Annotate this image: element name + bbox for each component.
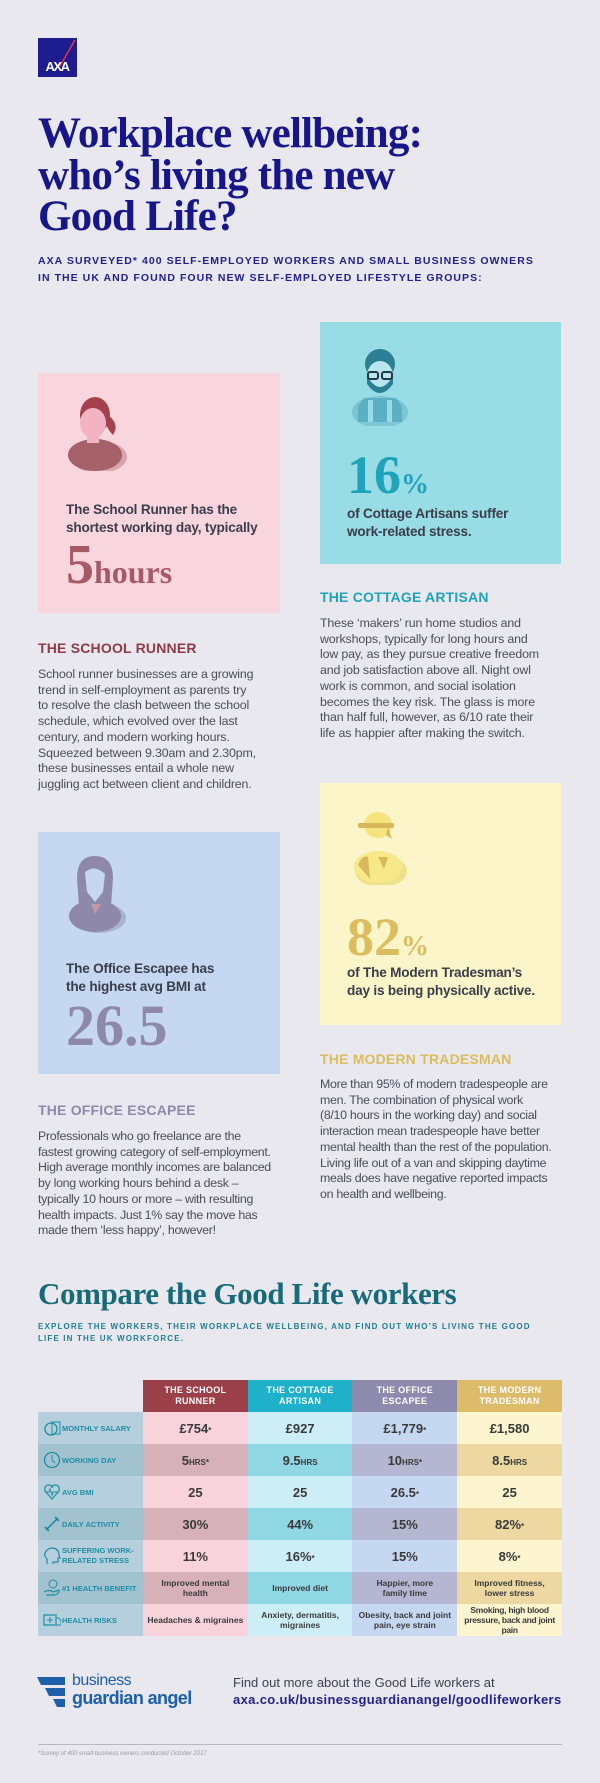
subtitle: compare: LIFE IN THE UK WORKFORCE. bbox=[38, 1334, 184, 1343]
stat text bbox=[66, 502, 258, 535]
logo: business guardian angel bbox=[37, 1672, 192, 1708]
table: comparison: 10HRS* bbox=[388, 1452, 422, 1468]
heading: the modern tradesman: THE MODERN TRADESMAN bbox=[320, 1051, 511, 1067]
table: comparison: #1 HEALTH BENEFIT bbox=[62, 1584, 136, 1592]
text: school runner description: School runner businesses are a growing bbox=[38, 667, 253, 681]
table: comparison: £927 bbox=[286, 1420, 315, 1436]
text: cottage artisan description: life as happier after making the switch. bbox=[320, 726, 525, 740]
table: comparison: 25 bbox=[188, 1484, 203, 1500]
table: comparison: £1,580 bbox=[490, 1420, 529, 1436]
table: comparison: RELATED STRESS bbox=[62, 1556, 129, 1565]
stat text: work-related stress. bbox=[347, 524, 471, 538]
stat text: The Office Escapee has bbox=[66, 961, 214, 976]
stat text bbox=[347, 965, 535, 998]
text: cottage artisan description: These ‘makers’ run home studios and bbox=[320, 616, 521, 630]
logo: business guardian angel: business bbox=[72, 1672, 131, 1689]
big number: 26.5: 26.5 bbox=[66, 993, 168, 1058]
text: modern tradesman description: meals does have negative reported impacts bbox=[320, 1171, 547, 1185]
table: comparison: ESCAPEE bbox=[382, 1396, 427, 1406]
title bbox=[38, 110, 422, 240]
text: modern tradesman description: Living life out of a van and skipping daytime bbox=[320, 1156, 546, 1170]
stat text: day is being physically active. bbox=[347, 982, 535, 998]
panel: modern tradesman bbox=[320, 783, 561, 1025]
table: comparison: 8.5HRS bbox=[492, 1452, 527, 1468]
icon: school runner woman bbox=[68, 397, 127, 471]
table: comparison: Improved diet bbox=[272, 1583, 328, 1593]
text: modern tradesman description bbox=[320, 1077, 551, 1201]
text: school runner description: these businesses entail a whole new bbox=[38, 761, 234, 775]
big number: 16%: 16% bbox=[347, 445, 429, 505]
table: comparison: THE COTTAGE bbox=[267, 1385, 334, 1395]
table: comparison: 25 bbox=[293, 1484, 307, 1500]
table: comparison: Happier, more bbox=[376, 1578, 433, 1588]
table: comparison: Anxiety, dermatitis, bbox=[261, 1610, 339, 1620]
table: comparison: 15% bbox=[392, 1548, 418, 1564]
subtitle: compare: EXPLORE THE WORKERS, THEIR WORKPLACE WELLBEING, AND FIND OUT WHO’S LIVING THE GOOD bbox=[38, 1322, 531, 1331]
footnote: *Survey of 400 small business owners conducted October 2017 bbox=[38, 1751, 207, 1757]
stat text: of The Modern Tradesman’s bbox=[347, 965, 522, 980]
text: school runner description: schedule, which evolved over the last bbox=[38, 714, 238, 728]
table: comparison: pressure, back and joint pain bbox=[464, 1615, 555, 1635]
table: comparison: Improved fitness, bbox=[474, 1578, 545, 1588]
table: comparison: 30% bbox=[182, 1516, 208, 1532]
text: modern tradesman description: interaction mean tradespeople have better bbox=[320, 1124, 540, 1138]
stat text: shortest working day, typically bbox=[66, 520, 257, 534]
table: comparison: AVG BMI bbox=[62, 1488, 94, 1496]
text: find out more: Find out more about the Good Life workers at bbox=[233, 1675, 495, 1690]
text: school runner description: trend in self-employment as parents try bbox=[38, 683, 246, 697]
text: school runner description: juggling act between client and children. bbox=[38, 777, 252, 791]
table: comparison: 15% bbox=[392, 1516, 418, 1532]
table: comparison: Smoking, high blood bbox=[470, 1605, 549, 1615]
text: cottage artisan description: and job satisfaction above all. Night owl bbox=[320, 663, 531, 677]
panel: cottage artisan bbox=[320, 322, 561, 564]
table: comparison: family time bbox=[383, 1588, 427, 1598]
text: office escapee description: typically 10 hours or more – with resulting bbox=[38, 1192, 253, 1206]
table: comparison: Improved mental bbox=[161, 1578, 229, 1588]
table: comparison bbox=[38, 1380, 562, 1636]
big number: 82%: 82% bbox=[347, 907, 429, 967]
text: cottage artisan description: than half full, however, as 6/10 rate their bbox=[320, 710, 533, 724]
text: modern tradesman description: men. The combination of physical work bbox=[320, 1093, 523, 1107]
table: comparison: DAILY ACTIVITY bbox=[62, 1520, 120, 1528]
table: comparison: migraines bbox=[280, 1620, 320, 1630]
logo: business guardian angel: guardian angel bbox=[72, 1688, 192, 1708]
text: cottage artisan description bbox=[320, 616, 539, 740]
table: comparison: WORKING DAY bbox=[62, 1456, 116, 1464]
table: comparison: pain, eye strain bbox=[374, 1620, 436, 1630]
table: comparison: 26.5* bbox=[391, 1484, 419, 1500]
title: Workplace wellbeing: bbox=[38, 110, 422, 157]
text: modern tradesman description: mental health than the rest of the population. bbox=[320, 1140, 551, 1154]
table: comparison: 9.5HRS bbox=[283, 1452, 318, 1468]
text: cottage artisan description: becomes the key risk. The glass is more bbox=[320, 695, 535, 709]
text: office escapee description bbox=[38, 1129, 271, 1237]
table: comparison: health bbox=[183, 1588, 208, 1598]
text: school runner description: to resolve the clash between the school bbox=[38, 698, 249, 712]
table: comparison: THE SCHOOL bbox=[164, 1385, 226, 1395]
text: cottage artisan description: low pay, as they pursue creative freedom bbox=[320, 647, 539, 661]
subtitle bbox=[38, 255, 534, 284]
table: comparison: ARTISAN bbox=[279, 1396, 321, 1406]
table: comparison: 11% bbox=[183, 1548, 208, 1564]
table: comparison: Headaches & migraines bbox=[147, 1615, 243, 1625]
text: office escapee description: High average monthly incomes are balanced bbox=[38, 1160, 271, 1174]
table: comparison: £1,779* bbox=[383, 1420, 426, 1436]
table: comparison: TRADESMAN bbox=[479, 1396, 540, 1406]
big number: 5 hours: 5hours bbox=[66, 534, 172, 596]
text: school runner description: Squeezed between 9.30am and 2.30pm, bbox=[38, 746, 256, 760]
table: comparison: lower stress bbox=[485, 1588, 534, 1598]
text: school runner description bbox=[38, 667, 256, 791]
table: comparison: SUFFERING WORK- bbox=[62, 1546, 134, 1555]
text: modern tradesman description: on health and wellbeing. bbox=[320, 1187, 446, 1201]
heading: compare the good life workers: Compare the Good Life workers bbox=[38, 1276, 456, 1311]
table: comparison: RUNNER bbox=[175, 1396, 216, 1406]
text: office escapee description: by long working hours behind a desk – bbox=[38, 1176, 238, 1190]
stat text bbox=[66, 961, 214, 994]
stat text: the highest avg BMI at bbox=[66, 978, 206, 994]
panel: office escapee bbox=[38, 832, 280, 1074]
table: comparison: MONTHLY SALARY bbox=[62, 1424, 131, 1432]
table: comparison: Obesity, back and joint bbox=[359, 1610, 451, 1620]
table: comparison: THE OFFICE bbox=[377, 1385, 433, 1395]
text: modern tradesman description: More than 95% of modern tradespeople are bbox=[320, 1077, 548, 1091]
table: comparison: 5HRS* bbox=[182, 1452, 209, 1468]
text: office escapee description: made them ‘less happy’, however! bbox=[38, 1223, 216, 1237]
heading: the cottage artisan: THE COTTAGE ARTISAN bbox=[320, 589, 489, 605]
text: school runner description: century, and modern working hours. bbox=[38, 730, 230, 744]
icon: office woman bbox=[69, 856, 126, 933]
table: comparison: £754* bbox=[179, 1420, 211, 1436]
table: comparison: 8%* bbox=[499, 1548, 521, 1564]
title: who’s living the new bbox=[38, 152, 394, 198]
stat text: of Cottage Artisans suffer bbox=[347, 506, 508, 521]
text: modern tradesman description: (8/10 hours in the working day) and social bbox=[320, 1108, 537, 1122]
subtitle: AXA SURVEYED* 400 SELF-EMPLOYED WORKERS AND SMALL BUSINESS OWNERS bbox=[38, 255, 534, 267]
text: url: axa.co.uk/businessguardianangel/goodlifeworkers bbox=[233, 1692, 562, 1707]
subtitle: IN THE UK AND FOUND FOUR NEW SELF-EMPLOYED LIFESTYLE GROUPS: bbox=[38, 272, 483, 284]
subtitle: compare bbox=[38, 1322, 531, 1343]
stat text: The School Runner has the bbox=[66, 502, 237, 517]
table: comparison: HEALTH RISKS bbox=[62, 1616, 117, 1624]
icon: bearded man bbox=[352, 349, 408, 426]
logo: AXA bbox=[38, 38, 77, 77]
table: comparison: THE MODERN bbox=[478, 1385, 541, 1395]
table: comparison: 82%* bbox=[495, 1516, 524, 1532]
heading: the office escapee: THE OFFICE ESCAPEE bbox=[38, 1102, 196, 1118]
icon: tradesman with hard hat bbox=[354, 812, 407, 885]
text: cottage artisan description: work is common, and social isolation bbox=[320, 679, 516, 693]
table: comparison: 16%* bbox=[286, 1548, 315, 1564]
text: office escapee description: fastest growing category of self-employment. bbox=[38, 1145, 271, 1159]
heading: the school runner: THE SCHOOL RUNNER bbox=[38, 640, 197, 656]
title: Good Life? bbox=[38, 193, 237, 240]
table: comparison: 44% bbox=[287, 1516, 313, 1532]
logo: AXA: AXA bbox=[46, 59, 71, 74]
table: comparison: 25 bbox=[502, 1484, 517, 1500]
text: cottage artisan description: workshops, typically for long hours and bbox=[320, 632, 528, 646]
panel: school runner bbox=[38, 373, 280, 613]
stat text bbox=[347, 506, 508, 538]
text: office escapee description: health impacts. Just 1% say the move has bbox=[38, 1208, 257, 1222]
text: office escapee description: Professionals who go freelance are the bbox=[38, 1129, 241, 1143]
